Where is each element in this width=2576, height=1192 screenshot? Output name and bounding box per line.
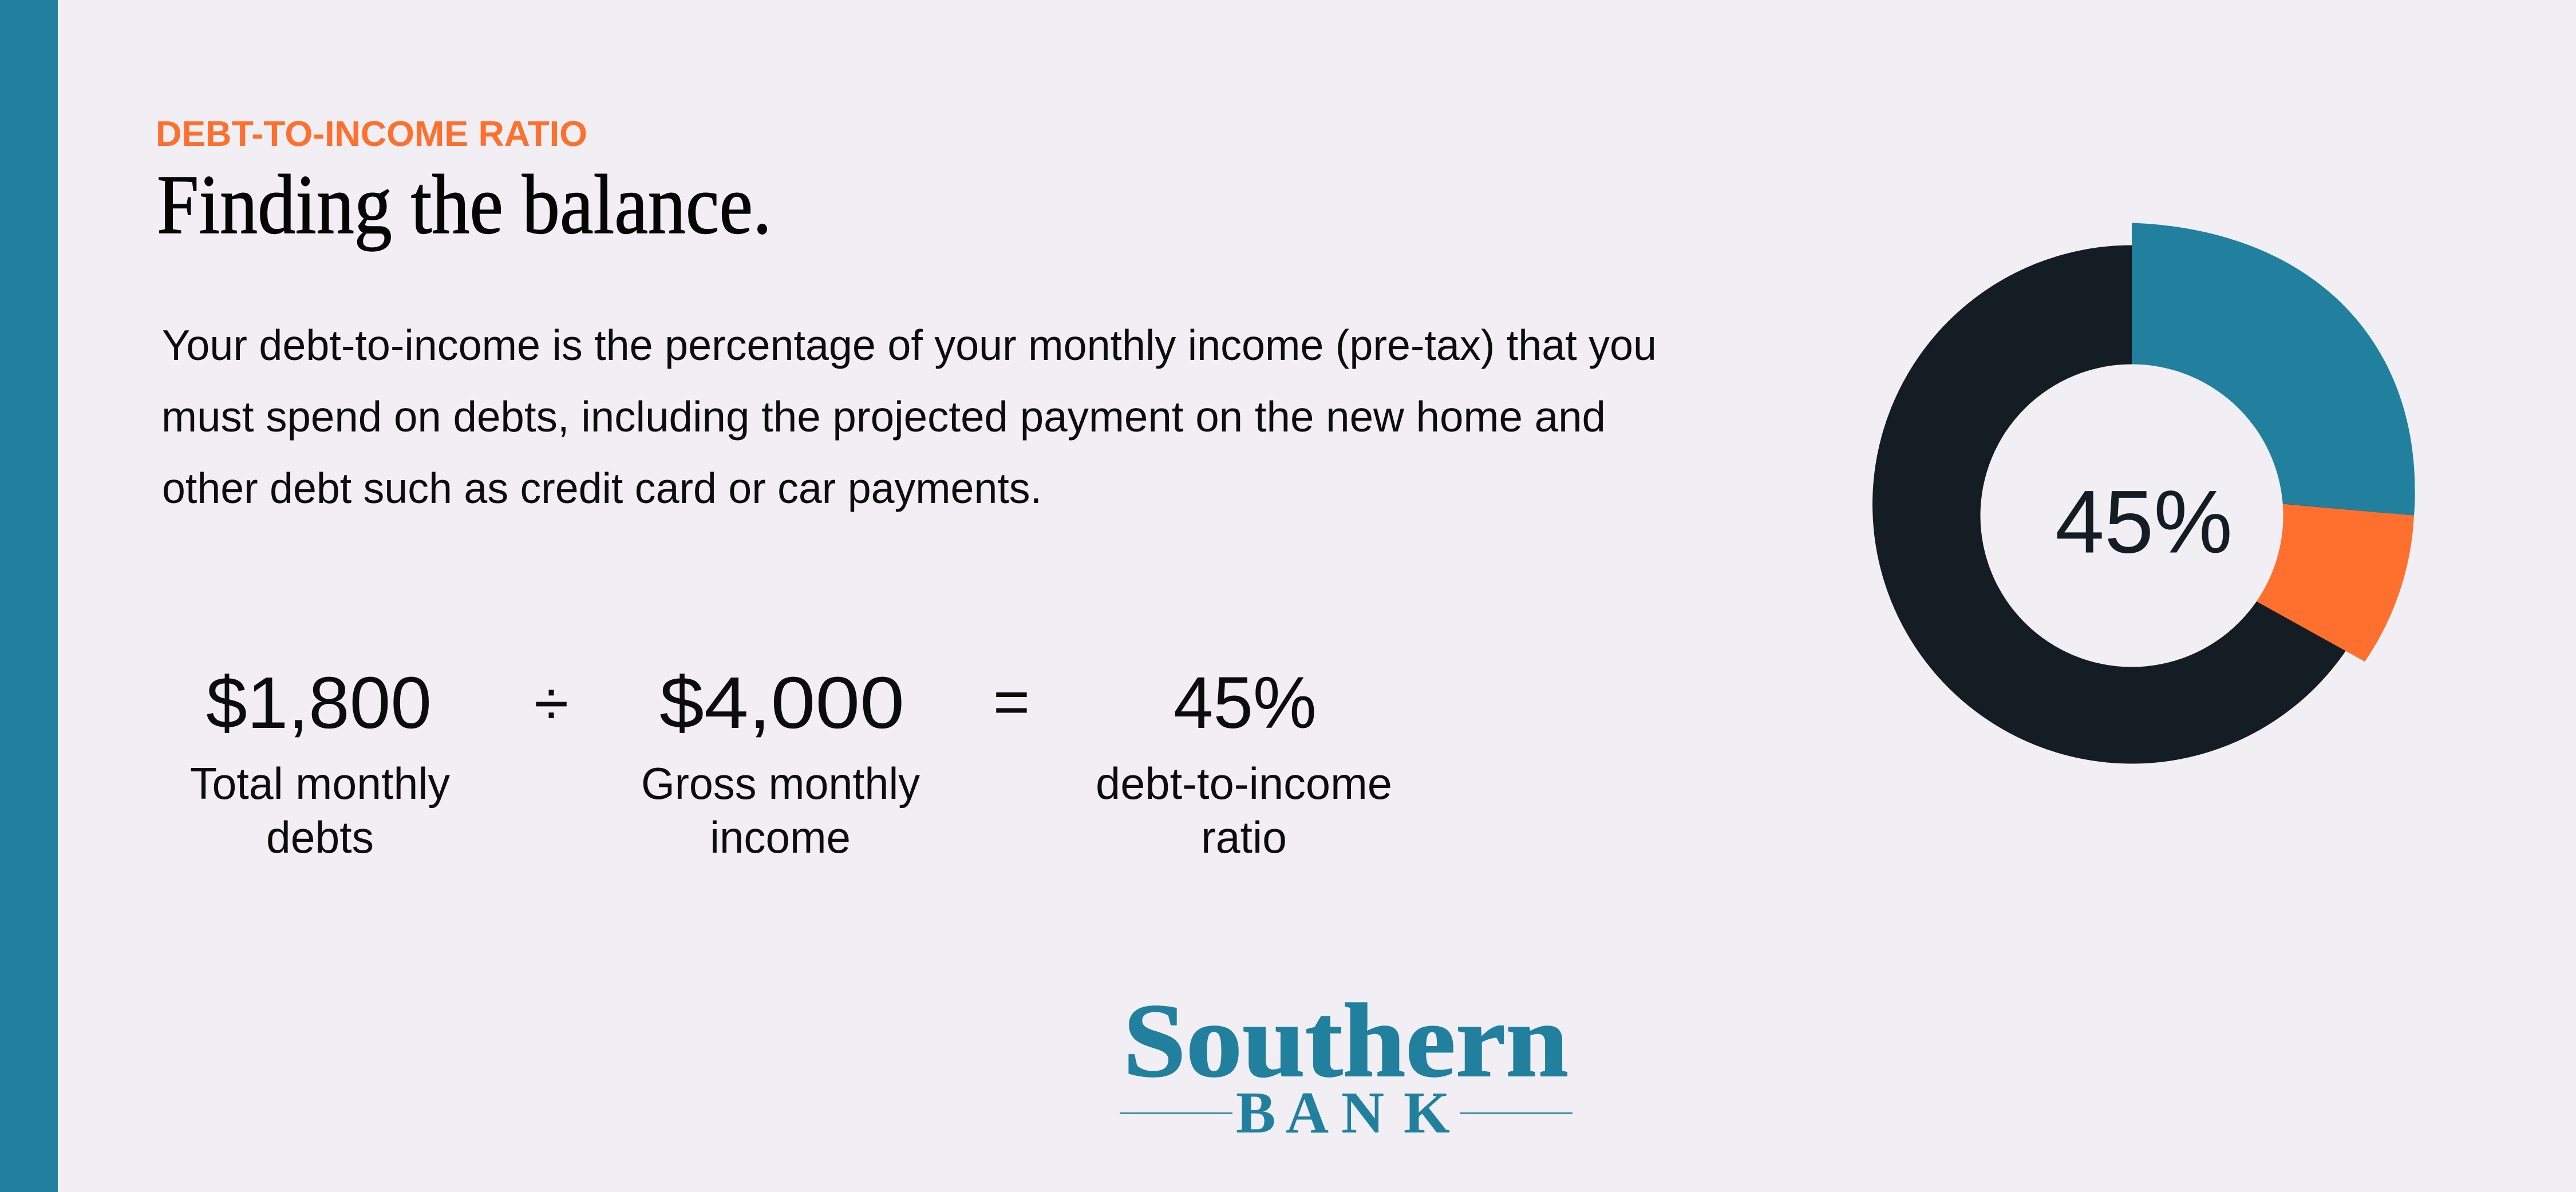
total monthly debts term: debts [266,812,374,862]
gross monthly income term: $4,000 [659,662,904,744]
logo subtitle: BANK [1236,1080,1450,1146]
donut hole [1981,364,2283,667]
result term: 45% [1174,662,1317,744]
gross monthly income term [641,662,920,862]
body line 1: Your debt-to-income is the percentage of your monthly income (pre-tax) that you [162,321,1657,369]
body line 2: must spend on debts, including the projected payment on the new home and [161,393,1606,441]
donut chart [1872,223,2415,763]
logo rule left [1120,1112,1232,1114]
divide sign: ÷ [534,668,568,739]
result term: ratio [1201,812,1287,862]
dark segment [1872,245,2391,763]
gross monthly income term: Gross monthly [641,758,920,809]
formula [190,662,1392,862]
logo: Southern Bank [1120,982,1573,1146]
left accent bar [0,0,58,1192]
eyebrow heading: DEBT-TO-INCOME RATIO [156,114,587,154]
body paragraph [161,321,1657,512]
gross monthly income term: income [710,812,851,862]
result term: debt-to-income [1096,758,1392,809]
equals sign: = [993,667,1030,737]
logo wordmark: Southern [1123,982,1568,1099]
result term [1096,662,1392,862]
title: Finding the balance. [157,158,772,252]
center percentage: 45% [2055,473,2233,572]
total monthly debts term [190,662,450,862]
body line 3: other debt such as credit card or car payments. [162,464,1042,512]
teal segment [2132,223,2415,516]
total monthly debts term: $1,800 [206,662,432,744]
total monthly debts term: Total monthly [190,758,450,809]
logo rule right [1460,1112,1573,1114]
orange segment [2204,497,2414,662]
